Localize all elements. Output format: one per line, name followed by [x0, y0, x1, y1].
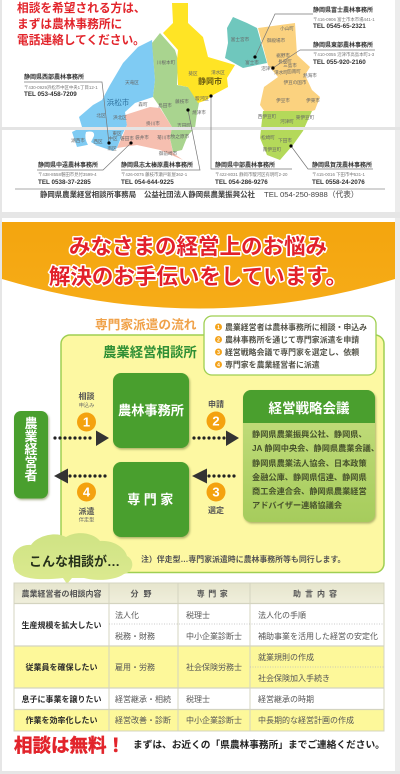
- map place names: 島田市: [158, 102, 172, 109]
- arrow: step 1: 1: [83, 414, 90, 430]
- banner title: 解決のお手伝いをしています。: [49, 265, 347, 289]
- map place names: 清水町: [274, 69, 288, 76]
- arrow: step 2: 2: [212, 414, 220, 428]
- box: management strategy council: アドバイザー連絡協議会: [252, 500, 343, 510]
- orange header banner: [2, 222, 395, 308]
- box: expert: [113, 462, 189, 537]
- panel: consultation office: [61, 335, 384, 572]
- office: Shida-Haibara: TEL 054-644-9225: [121, 179, 174, 186]
- city name: Shizuoka: 静岡市: [198, 76, 222, 86]
- steps legend box: 1: [217, 325, 220, 331]
- steps legend box: 農林事務所を通じて専門家派遣を申請: [225, 334, 359, 344]
- map place names: 小山町: [280, 25, 294, 32]
- arrow: step 4: 派遣: [78, 506, 94, 516]
- office: central: TEL 054-286-9276: [215, 179, 268, 186]
- map place names: 三島市: [283, 62, 297, 69]
- banner title: みなさまの経営上のお悩み: [69, 235, 327, 259]
- map place names: 葵区: [188, 70, 198, 77]
- row: secure employees: 社会保険加入手続き: [258, 673, 330, 683]
- office: Fuji: TEL 0545-65-2321: [313, 23, 366, 30]
- office: Chuen: 〒438-8558磐田市見付3599-4: [38, 171, 97, 178]
- map place names: 東伊豆町: [296, 114, 315, 121]
- intro message: まずは農林事務所に: [17, 17, 122, 31]
- speech cloud: what kind of consultation: こんな相談が…: [29, 554, 120, 569]
- row: secure employees: 雇用・労務: [115, 662, 155, 672]
- map place names: 富士市: [245, 59, 259, 66]
- steps legend box: 4: [217, 362, 220, 368]
- office: Kamo: [312, 161, 372, 186]
- contact prompt: まずは、お近くの「県農林事務所」までご連絡ください。: [133, 738, 385, 751]
- office: Fuji: 〒416-0906 富士市本市場441-1: [313, 16, 375, 23]
- row: improve efficiency: 中小企業診断士: [186, 715, 242, 725]
- arrow: step 4: [54, 468, 110, 524]
- arrow: step 1: 相談: [78, 391, 94, 401]
- map place names: 伊豆の国市: [284, 79, 307, 86]
- box: agriculture and forestry office: [113, 373, 189, 448]
- intro message: [17, 1, 146, 47]
- box: management strategy council: [243, 390, 379, 522]
- steps legend box: 3: [217, 350, 220, 356]
- map place names: 湖西市: [71, 137, 85, 144]
- intro message: 相談を希望される方は、: [17, 1, 146, 15]
- arrow: step 1: [55, 391, 109, 446]
- office: west: TEL 053-458-7209: [24, 91, 77, 98]
- steps legend box: 農業経営者は農林事務所に相談・申込み: [225, 322, 367, 332]
- map place names: 森町: [138, 101, 148, 108]
- footer contact line: 公益社団法人静岡県農業振興公社: [144, 190, 255, 199]
- row: hand over business: 経営継承の時期: [258, 694, 314, 704]
- arrow: step 4: 4: [83, 484, 91, 500]
- arrow: step 2: [194, 399, 239, 446]
- table header row: [14, 583, 384, 604]
- map place names: 浜北区: [113, 114, 127, 121]
- map place names: 袋井市: [135, 134, 149, 141]
- map place names: 御前崎市: [159, 150, 178, 157]
- region: Fuji area (teal): [225, 17, 267, 68]
- box: expert: 専門家: [127, 492, 177, 507]
- map place names: 富士宮市: [231, 36, 250, 43]
- steps legend box: 経営戦略会議で専門家を選定し、依頼: [225, 347, 359, 357]
- region: Hamamatsu area (blue): [72, 40, 155, 151]
- map place names: 東区: [112, 130, 122, 137]
- map place names: 裾野市: [276, 52, 290, 59]
- office: west: 〒430-0929浜松市中区中央1丁目12-1: [24, 84, 98, 91]
- box: management strategy council: 静岡県農業法人協会、日本政策: [252, 458, 367, 468]
- panel title: 農業経営相談所: [103, 344, 197, 360]
- office: Shida-Haibara: 静岡県志太榛原農林事務所: [121, 161, 193, 169]
- map place names: 北区: [96, 112, 106, 119]
- row: expand production scale: 法人化: [115, 610, 139, 620]
- office: east: 〒410-0055 沼津市高島本町1-3: [313, 51, 375, 58]
- map place names: 西区: [93, 139, 103, 145]
- map place names: 伊豆市: [276, 97, 290, 104]
- map place names: 沼津市: [261, 65, 275, 72]
- map place names: 松崎町: [261, 134, 275, 141]
- office: east: TEL 055-920-2160: [313, 59, 366, 66]
- row: expand production scale: [22, 610, 378, 641]
- box: farmer: 農: [24, 416, 38, 431]
- footer contact line: TEL 054-250-8988（代表）: [264, 189, 359, 199]
- box: farmer: 経: [24, 442, 38, 457]
- office: central: [215, 161, 288, 186]
- arrow: step 3: 3: [212, 484, 220, 500]
- office: central: 静岡県中部農林事務所: [215, 161, 275, 169]
- box: farmer: 営: [24, 455, 38, 470]
- box: management strategy council: 静岡県農業振興公社、静岡県、: [252, 429, 367, 439]
- consultation table: [14, 583, 384, 731]
- office: Kamo: 静岡県賀茂農林事務所: [312, 161, 372, 169]
- row: improve efficiency: [26, 715, 354, 725]
- region: central west area (green): [152, 33, 199, 152]
- office: Chuen: TEL 0538-37-2285: [38, 179, 91, 186]
- row: hand over business: 税理士: [186, 694, 210, 704]
- office: Chuen: 静岡県中遠農林事務所: [38, 161, 98, 169]
- office: Fuji: [313, 6, 375, 30]
- map place names: 長泉町: [278, 58, 292, 65]
- steps legend box: [204, 316, 376, 375]
- office: central: 〒422-8031 静岡市駿河区有明町2-20: [215, 171, 288, 178]
- office: Shida-Haibara: [121, 161, 193, 186]
- heading: expert dispatch flow: 専門家派遣の流れ: [95, 317, 197, 332]
- steps legend box: 専門家を農業経営者に派遣: [225, 360, 320, 370]
- table header row: 専門家: [197, 588, 231, 598]
- map place names: 伊東市: [306, 97, 320, 104]
- row: expand production scale: 法人化の手順: [258, 610, 306, 620]
- office leader lines: [24, 14, 375, 170]
- map place names: 藤枝市: [175, 98, 189, 105]
- table header row: 助言内容: [293, 588, 341, 598]
- region: east area (orange): [258, 23, 320, 113]
- row: improve efficiency: 中長期的な経営計画の作成: [258, 715, 354, 725]
- map place names: 川根本町: [157, 59, 176, 66]
- office: Kamo: 〒415-0016 下田市中531-1: [312, 171, 366, 178]
- row: secure employees: 従業員を確保したい: [26, 662, 98, 672]
- map place names: 熱海市: [303, 72, 317, 79]
- office: Fuji: 静岡県富士農林事務所: [313, 6, 373, 14]
- table header row: 農業経営者の相談内容: [22, 588, 102, 598]
- map place names: 掛川市: [146, 120, 160, 127]
- map place names: 駿河区: [195, 95, 209, 102]
- row: improve efficiency: 作業を効率化したい: [26, 715, 98, 725]
- office: west: 静岡県西部農林事務所: [24, 73, 84, 81]
- intro message: 電話連絡してください。: [17, 33, 145, 47]
- arrow: step 2: 申請: [208, 399, 224, 409]
- map place names: [71, 25, 320, 157]
- banner title: [49, 235, 347, 289]
- row: expand production scale: 生産規模を拡大したい: [22, 620, 102, 630]
- row: expand production scale: 税務・財務: [115, 631, 155, 641]
- footer contact line: [40, 189, 359, 199]
- office: Shida-Haibara: 〒426-0075 藤枝市瀬戸新屋362-1: [121, 171, 188, 178]
- map place names: 焼津市: [192, 109, 206, 116]
- map place names: 磐田市: [120, 135, 134, 142]
- row: secure employees: [26, 652, 330, 683]
- map place names: 吉田町: [177, 123, 191, 129]
- row: hand over business: 経営継承・相続: [115, 694, 171, 704]
- map place names: 函南町: [287, 68, 301, 75]
- arrow: step 3: [192, 468, 239, 515]
- box: farmer: [14, 411, 48, 498]
- box: management strategy council: 商工会連合会、静岡県農業経営: [252, 486, 367, 496]
- map place names: 天竜区: [125, 79, 139, 86]
- map place names: 西伊豆町: [258, 113, 277, 120]
- office: Chuen: [38, 161, 98, 186]
- office: east: [313, 41, 375, 66]
- row: expand production scale: 中小企業診断士: [186, 631, 242, 641]
- map place names: 菊川市: [157, 134, 171, 141]
- arrow: step 3: 選定: [208, 505, 224, 515]
- speech cloud: what kind of consultation: [13, 533, 132, 584]
- footnote: 注）伴走型…専門家派遣時に農林事務所等も同行します。: [141, 554, 345, 564]
- map place names: 牧之原市: [171, 133, 190, 140]
- row: expand production scale: 補助事業を活用した経営の安定化: [258, 631, 378, 641]
- row: secure employees: 社会保険労務士: [186, 662, 242, 672]
- box: farmer: 者: [24, 468, 38, 483]
- free consultation message: 相談は無料！: [14, 735, 125, 756]
- map place names: 下田市: [278, 137, 292, 144]
- city name: Hamamatsu: 浜松市: [107, 97, 130, 107]
- box: management strategy council: JA 静岡中央会、静岡県農業会議、: [252, 443, 379, 453]
- map place names: 中区: [108, 135, 118, 142]
- box: management strategy council: 金融公庫、静岡県信連、静岡県: [252, 472, 367, 482]
- map place names: 清水区: [211, 69, 225, 76]
- footer contact line: 静岡県農業経営相談所事務局: [40, 190, 136, 199]
- box: agriculture and forestry office: 農林事務所: [118, 402, 184, 418]
- region: Shizuoka city area (yellow): [163, 3, 235, 103]
- row: expand production scale: 税理士: [186, 610, 210, 620]
- box: management strategy council: 経営戦略会議: [268, 400, 350, 416]
- row: improve efficiency: 経営改善・診断: [115, 715, 171, 725]
- table header row: 分野: [130, 588, 156, 598]
- region: Shida-Haibara area (pink): [117, 107, 183, 160]
- row: hand over business: 息子に事業を譲りたい: [22, 694, 102, 704]
- box: farmer: 業: [24, 429, 38, 444]
- region: Kamo area (lime): [260, 111, 312, 160]
- arrow: step 4: 伴走型: [79, 516, 94, 524]
- row: secure employees: 就業規則の作成: [258, 652, 314, 662]
- map of Shizuoka prefecture: [71, 3, 320, 160]
- row: hand over business: [22, 694, 314, 704]
- map place names: 南伊豆町: [263, 146, 282, 153]
- office: east: 静岡県東部農林事務所: [313, 41, 373, 49]
- map place names: 南区: [107, 145, 117, 152]
- office: Kamo: TEL 0558-24-2076: [312, 179, 365, 186]
- office: west: [24, 73, 98, 98]
- fold line: [0, 127, 400, 130]
- map place names: 河津町: [280, 118, 294, 125]
- map place names: 御殿場市: [267, 37, 286, 44]
- steps legend box: 2: [217, 338, 220, 344]
- arrow: step 1: 申込み: [79, 401, 94, 409]
